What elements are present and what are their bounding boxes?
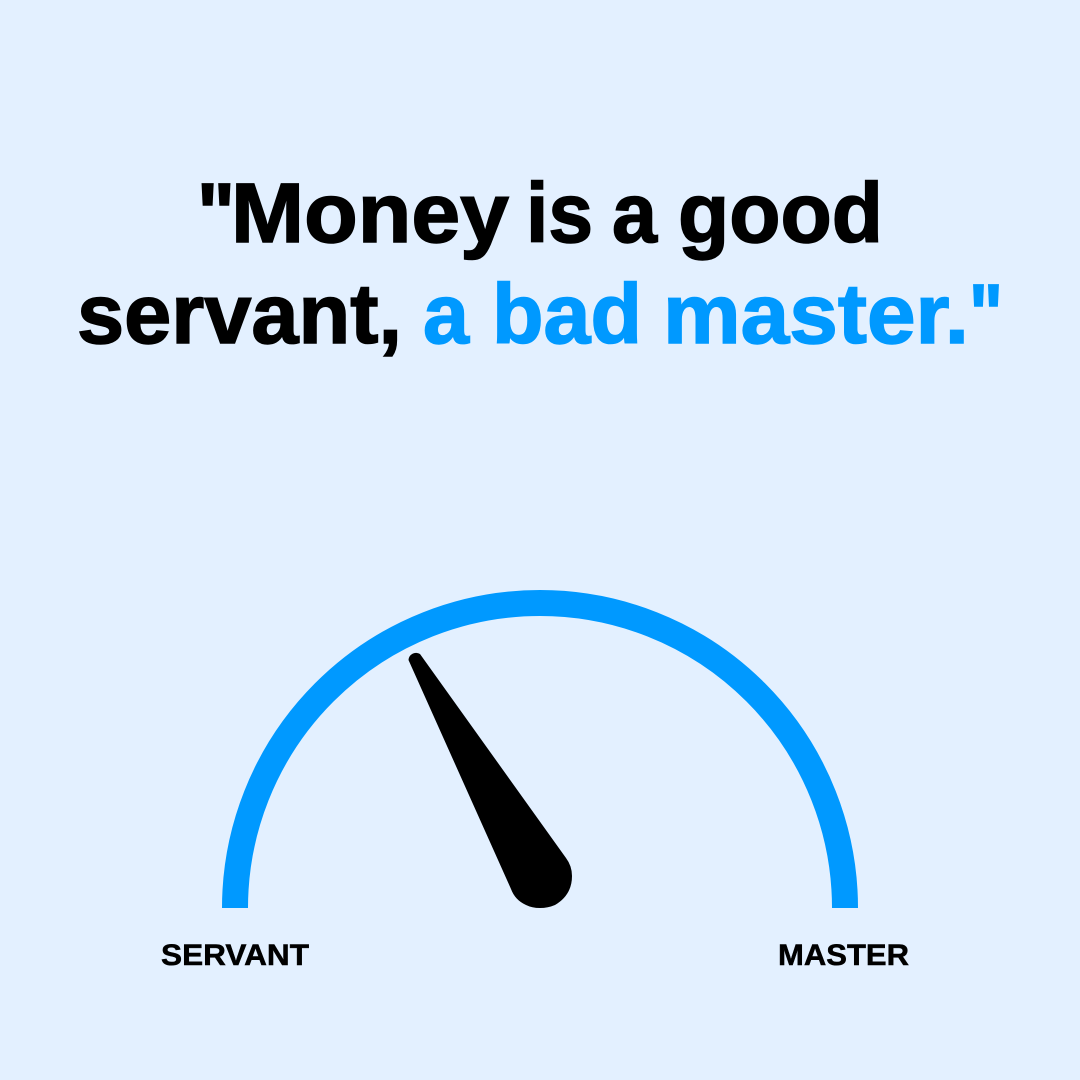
title line 2: bad	[492, 267, 642, 361]
title line 2: master.	[663, 267, 969, 361]
title line 1: "	[197, 166, 235, 260]
title line 1	[197, 166, 883, 260]
title quote	[77, 166, 1003, 361]
title line 1: a	[612, 166, 658, 260]
label: servant: SERVANT	[161, 939, 309, 972]
title line 2: "	[969, 267, 1003, 361]
gauge chart	[235, 603, 845, 908]
gauge arc	[235, 603, 845, 908]
title line 1: Money	[231, 166, 509, 260]
title line 1: is	[526, 166, 593, 260]
title line 2: servant,	[77, 267, 402, 361]
title line 1: good	[678, 166, 883, 260]
title line 2	[77, 267, 1003, 361]
label: master: MASTER	[778, 939, 909, 972]
title line 2: a	[423, 267, 470, 361]
gauge needle	[408, 653, 572, 908]
